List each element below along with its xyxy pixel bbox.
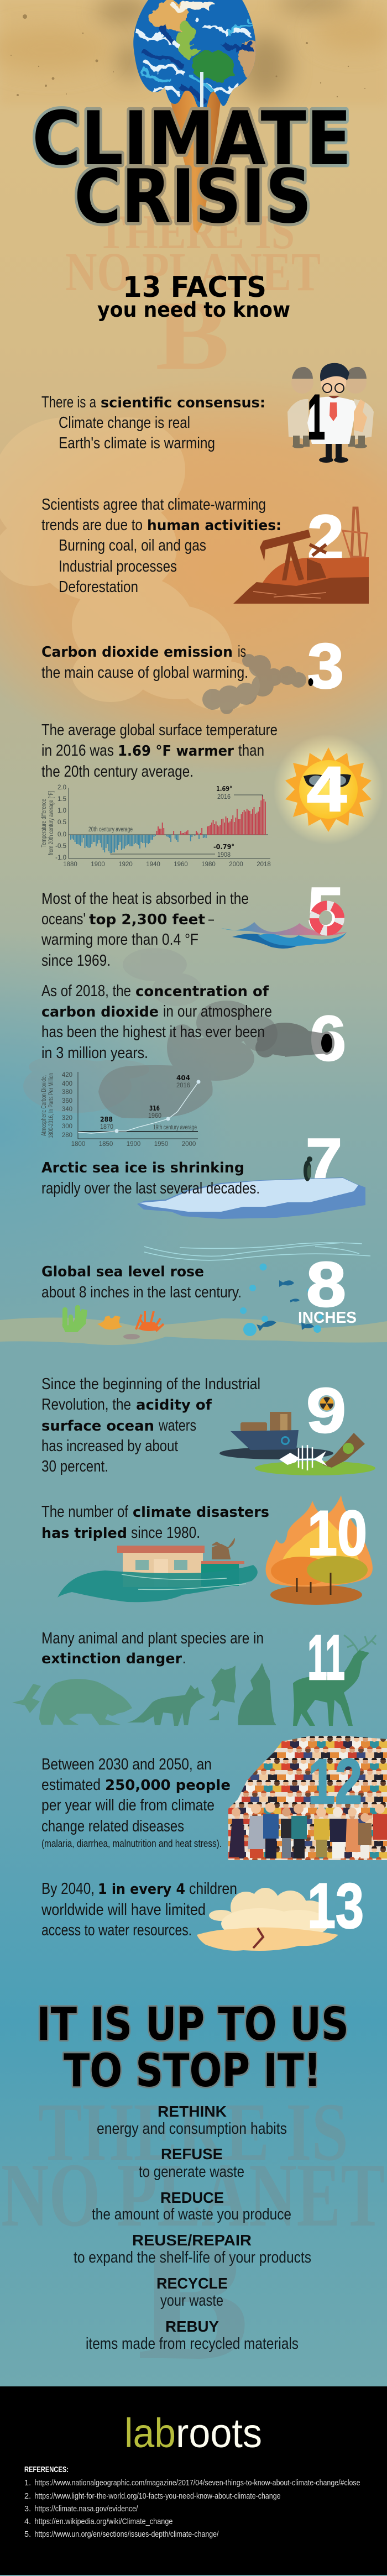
- references: 1.: [24, 2479, 31, 2488]
- x axis labels: 1880: [63, 861, 77, 868]
- y axis labels: 360: [62, 1098, 72, 1104]
- fact text: about 8 inches in the last century.: [41, 1284, 242, 1301]
- subtitle: 13 facts you need to know: 13 FACTS: [123, 271, 266, 304]
- y axis labels: 280: [62, 1132, 72, 1139]
- x axis labels: 1950: [154, 1141, 168, 1148]
- fact text: is: [238, 643, 246, 661]
- icon: radiation badge: [318, 1395, 335, 1412]
- number 5: 5: [307, 875, 344, 946]
- icon: crowd of people: [228, 1736, 387, 1860]
- fact text: 30 percent.: [41, 1458, 108, 1475]
- rethink: energy and consumption habits: [97, 2120, 287, 2138]
- fact text: (malaria, diarrhea, malnutrition and heat stress).: [41, 1838, 222, 1849]
- data points: [115, 1080, 200, 1133]
- top watermark: there is no planet B: [65, 206, 321, 390]
- fact 6: carbon dioxide concentration: [23, 948, 346, 1148]
- icon: scientists: [287, 363, 374, 463]
- fact text: By 2040,: [41, 1880, 95, 1898]
- references: REFERENCES:: [24, 2465, 69, 2474]
- icon: oil field: [233, 508, 369, 604]
- y axis labels: 320: [62, 1115, 72, 1122]
- fact text: the 20th century average.: [41, 763, 194, 781]
- y axis labels: [55, 784, 66, 861]
- icon: flooded house with cat: [57, 1538, 258, 1602]
- y axis labels: 1.0: [57, 808, 66, 814]
- logo: labroots: roots: [176, 2410, 262, 2456]
- number 8 with inches: INCHES: [298, 1309, 357, 1327]
- sea surface lines: [144, 1243, 370, 1260]
- fact text: 1.69 °F warmer: [118, 743, 234, 760]
- number 6: 6: [310, 1003, 346, 1074]
- fact text: Climate change is real: [59, 414, 190, 432]
- fact text: surface ocean: [41, 1418, 154, 1434]
- y axis labels: -0.5: [55, 843, 66, 850]
- annotations: 1960: [148, 1113, 161, 1119]
- cool-year bars: [71, 835, 206, 853]
- fact text: since 1980.: [131, 1524, 200, 1542]
- top watermark: there is no planet B: NO PLANET: [65, 241, 321, 302]
- annotations: 1870: [100, 1124, 113, 1130]
- number 2: 2: [307, 502, 344, 573]
- fact text: There is a: [41, 394, 97, 411]
- recycle: [156, 2275, 228, 2310]
- reuse and repair: to expand the shelf-life of your products: [74, 2249, 311, 2266]
- front row figures: [229, 1803, 387, 1858]
- x axis labels: 1980: [201, 861, 216, 868]
- fact text: estimated: [41, 1776, 101, 1794]
- fact text: 1 in every 4: [98, 1881, 185, 1898]
- annotations: 404: [176, 1074, 190, 1082]
- number 8 with inches: [298, 1249, 357, 1327]
- subtitle: 13 facts you need to know: [97, 271, 290, 322]
- fact text: –: [208, 910, 215, 928]
- icon: melting earth ice cream cone: [130, 0, 260, 233]
- y axis labels: 340: [62, 1106, 72, 1113]
- recycle: your waste: [160, 2292, 223, 2310]
- icon: polluted ocean with ship, fish bones and barrel: [219, 1412, 375, 1475]
- fact text: has increased by about: [41, 1437, 178, 1455]
- x axis labels: 1960: [174, 861, 188, 868]
- bird: [12, 1684, 41, 1713]
- fact 13: water scarcity: [41, 1871, 364, 1951]
- reduce: REDUCE: [160, 2189, 224, 2206]
- annotations: [88, 784, 263, 858]
- annotations: 1.69°: [216, 784, 232, 793]
- references: https://en.wikipedia.org/wiki/Climate_change: [34, 2517, 172, 2526]
- fact text: concentration of: [135, 983, 269, 1000]
- number 11: 11: [307, 1622, 345, 1693]
- recycle: RECYCLE: [156, 2275, 228, 2292]
- fact text: per year will die from climate: [41, 1797, 215, 1814]
- axis title: Atmospheric Carbon Dioxide,: [41, 1075, 48, 1136]
- number 8 with inches: 8: [306, 1249, 346, 1320]
- bottom watermark: there is no planet B: [1, 2086, 385, 2397]
- fox: [127, 1685, 205, 1726]
- fact text: The number of: [41, 1503, 129, 1521]
- fact text: Earth's climate is warming: [59, 434, 215, 452]
- annotations: 20th century average: [88, 826, 133, 833]
- fact text: Many animal and plant species are in: [41, 1630, 264, 1647]
- annotations: 19th century average: [153, 1124, 197, 1131]
- title: climate crisis: [32, 96, 352, 240]
- fact text: [41, 1880, 237, 1939]
- references: 2.: [24, 2492, 31, 2501]
- butterfly: [208, 1711, 219, 1720]
- waffle cone: [168, 88, 222, 233]
- fact text: access to water resources.: [41, 1921, 192, 1939]
- x axis labels: 1900: [127, 1141, 140, 1148]
- fact text: oceans': [41, 910, 86, 928]
- y axis labels: 2.0: [57, 784, 66, 791]
- y axis labels: 380: [62, 1089, 72, 1096]
- x axis labels: 1920: [118, 861, 133, 868]
- annotations: 288: [100, 1115, 113, 1123]
- logo: labroots: lab: [124, 2410, 176, 2456]
- annotations: 316: [149, 1104, 160, 1112]
- fact text: since 1969.: [41, 952, 111, 970]
- title: climate crisis: CLIMATE: [32, 96, 352, 182]
- fact text: [41, 890, 249, 970]
- fact text: [41, 1375, 260, 1475]
- y axis labels: 420: [62, 1072, 72, 1078]
- number 13: 13: [307, 1871, 364, 1941]
- fact text: Revolution, the: [41, 1396, 131, 1413]
- refuse: REFUSE: [161, 2145, 223, 2163]
- title: climate crisis: CRISIS: [74, 154, 312, 240]
- fact text: has been the highest it has ever been: [41, 1023, 265, 1041]
- references: 5.: [24, 2530, 31, 2539]
- number 7: 7: [306, 1126, 342, 1197]
- fact text: climate disasters: [133, 1504, 269, 1521]
- x axis labels: 1900: [91, 861, 105, 868]
- fact text: The average global surface temperature: [41, 721, 278, 739]
- closing heading: it is up to us to stop it: [36, 1998, 349, 2097]
- icon: corals and rock: [62, 1305, 164, 1339]
- axis title: [41, 1073, 55, 1138]
- fact text: [41, 721, 278, 781]
- x axis labels: 2000: [182, 1141, 196, 1148]
- pale cloud behind first facts: [0, 417, 260, 710]
- fact text: [41, 1756, 231, 1849]
- fact text: in our atmosphere: [163, 1003, 272, 1020]
- header smoke and dust: [0, 0, 387, 100]
- wolf: [238, 1663, 276, 1725]
- fact text: [41, 643, 248, 682]
- fact text: 250,000 people: [105, 1777, 231, 1794]
- fact 12: people at risk: [41, 1736, 387, 1860]
- rebuy: [86, 2318, 299, 2353]
- icon: pipe with large smoke cloud: [23, 948, 334, 1118]
- fact text: [41, 1264, 242, 1301]
- fact text: extinction danger: [41, 1651, 182, 1667]
- fact text: Scientists agree that climate-warming: [41, 496, 266, 514]
- y axis labels: 300: [62, 1123, 72, 1130]
- number 1: 1: [307, 382, 325, 453]
- references: https://www.light-for-the-world.org/10-facts-you-need-know-about-climate-change: [34, 2492, 281, 2501]
- bar chart: temperature anomaly 1880-2018: [41, 784, 271, 868]
- fact text: [41, 496, 281, 596]
- fact text: Arctic sea ice is shrinking: [41, 1160, 244, 1176]
- fact 4: temperature: [41, 721, 384, 868]
- line chart: atmospheric carbon dioxide: [41, 1072, 200, 1148]
- x axis labels: 1800: [71, 1141, 85, 1148]
- x axis labels: 2000: [229, 861, 243, 868]
- fact text: has tripled: [41, 1525, 127, 1542]
- number 3: 3: [307, 631, 344, 701]
- fact 9: ocean acidity: [41, 1375, 375, 1475]
- fact text: Between 2030 and 2050, an: [41, 1756, 212, 1773]
- fact text: [41, 1503, 269, 1542]
- owl: [211, 1666, 236, 1707]
- fact text: warming more than 0.4 °F: [41, 931, 198, 949]
- fact text: Since the beginning of the Industrial: [41, 1375, 260, 1393]
- icon: dry cracked earth bloom: [197, 1888, 338, 1951]
- fact text: Industrial processes: [59, 558, 177, 575]
- fact text: Most of the heat is absorbed in the: [41, 890, 249, 908]
- fact text: in 2016 was: [41, 742, 114, 760]
- y axis labels: [62, 1072, 72, 1139]
- fact 11: extinction danger: [12, 1622, 376, 1726]
- fact text: top 2,300 feet: [89, 912, 205, 928]
- icon: waves and life ring: [221, 905, 347, 949]
- rethink: RETHINK: [158, 2103, 227, 2120]
- rebuy: items made from recycled materials: [86, 2335, 299, 2353]
- axis title: 1800-2016, In Parts Per Million: [48, 1073, 55, 1138]
- reduce: the amount of waste you produce: [92, 2206, 291, 2223]
- warm-year bars: [157, 795, 265, 835]
- x axis labels: [71, 1141, 196, 1148]
- fact text: scientific consensus:: [101, 395, 265, 411]
- fact text: change related diseases: [41, 1818, 184, 1835]
- y axis labels: -1.0: [55, 855, 66, 861]
- melting earth scoop: [133, 0, 256, 107]
- fact text: [41, 1160, 260, 1197]
- references: https://climate.nasa.gov/evidence/: [34, 2505, 138, 2514]
- fact 3: carbon dioxide emission: [41, 631, 344, 714]
- references: 3.: [24, 2505, 31, 2514]
- x axis labels: [63, 861, 271, 868]
- fact text: the main cause of global warming.: [41, 664, 248, 682]
- axis title: [41, 791, 55, 855]
- fact text: Deforestation: [59, 578, 138, 596]
- bear: [39, 1679, 132, 1725]
- top watermark: there is no planet B: THERE IS: [97, 206, 295, 259]
- icon: ice floe: [137, 1177, 365, 1219]
- closing heading: it is up to us to stop it: TO STOP IT!: [64, 2045, 321, 2097]
- number 4: 4: [307, 754, 347, 825]
- fact 10: climate disasters: [41, 1495, 373, 1605]
- deer: [293, 1635, 376, 1726]
- fact 7: arctic sea ice: [41, 1126, 365, 1219]
- icon: sun with sunglasses: [273, 734, 384, 845]
- icon: bubbles: [240, 1264, 323, 1336]
- fact text: trends are due to: [41, 516, 143, 534]
- icon: pipe with smoke: [202, 654, 313, 714]
- references: 4.: [24, 2517, 31, 2526]
- y axis labels: 0.5: [57, 819, 66, 826]
- icon: penguin: [304, 1156, 312, 1181]
- fact text: in 3 million years.: [41, 1044, 148, 1062]
- top watermark: there is no planet B: B: [155, 280, 229, 390]
- footer panel: [0, 2386, 387, 2575]
- fact text: Global sea level rose: [41, 1264, 204, 1280]
- fact 2: human activities: [41, 496, 369, 604]
- fact text: Burning coal, oil and gas: [59, 537, 206, 554]
- annotations: -0.79°: [213, 842, 234, 851]
- y axis labels: 1.5: [57, 796, 66, 803]
- x axis labels: 1940: [146, 861, 160, 868]
- fact text: acidity of: [136, 1397, 212, 1413]
- icon: wildfire: [266, 1495, 373, 1605]
- references: https://www.un.org/en/sections/issues-depth/climate-change/: [34, 2530, 219, 2539]
- number 12: 12: [308, 1746, 362, 1817]
- axis title: Temperature difference: [41, 799, 48, 847]
- icon: endangered animal silhouettes: [12, 1635, 376, 1726]
- bottom watermark: there is no planet B: B: [137, 2201, 249, 2397]
- fact text: .: [182, 1650, 186, 1667]
- reuse and repair: [74, 2232, 311, 2266]
- fact text: [41, 394, 265, 452]
- annotations: 1908: [217, 852, 231, 858]
- references: [24, 2465, 360, 2539]
- rethink: [97, 2103, 287, 2138]
- subtitle: 13 facts you need to know: you need to know: [97, 298, 290, 322]
- fact text: rapidly over the last several decades.: [41, 1180, 260, 1197]
- fact text: than: [238, 742, 264, 760]
- fact text: carbon dioxide: [41, 1004, 159, 1020]
- refuse: [139, 2145, 244, 2181]
- icon: fish: [257, 1280, 314, 1331]
- annotations: [100, 1074, 197, 1131]
- annotations: 2016: [176, 1082, 190, 1089]
- rebuy: REBUY: [165, 2318, 219, 2335]
- number 9: 9: [306, 1375, 346, 1446]
- fact text: Carbon dioxide emission: [41, 644, 233, 661]
- axis title: from 20th century average [°F]: [48, 791, 55, 855]
- y axis labels: 0.0: [57, 831, 66, 838]
- fact text: worldwide will have limited: [41, 1901, 206, 1919]
- fact 5: ocean heat: [41, 875, 347, 970]
- y axis labels: 400: [62, 1081, 72, 1087]
- number 10: 10: [307, 1498, 367, 1569]
- fact 8: sea level: [0, 1243, 387, 1345]
- fact 1: scientific consensus: [41, 363, 374, 463]
- fact text: waters: [158, 1417, 196, 1434]
- fact text: children: [189, 1880, 237, 1898]
- reuse and repair: REUSE/REPAIR: [132, 2232, 252, 2249]
- reduce: [92, 2189, 291, 2223]
- fact text: As of 2018, the: [41, 982, 131, 1000]
- seabed band: [0, 1318, 387, 1345]
- x axis labels: 1850: [99, 1141, 113, 1148]
- list: what you can do: [74, 2103, 311, 2353]
- refuse: to generate waste: [139, 2163, 244, 2181]
- fact text: [41, 982, 272, 1062]
- annotations: 2016: [217, 794, 231, 800]
- fact text: [41, 1630, 264, 1667]
- x axis labels: 2018: [257, 861, 271, 868]
- fact text: human activities:: [147, 517, 281, 534]
- logo: labroots: [124, 2410, 262, 2456]
